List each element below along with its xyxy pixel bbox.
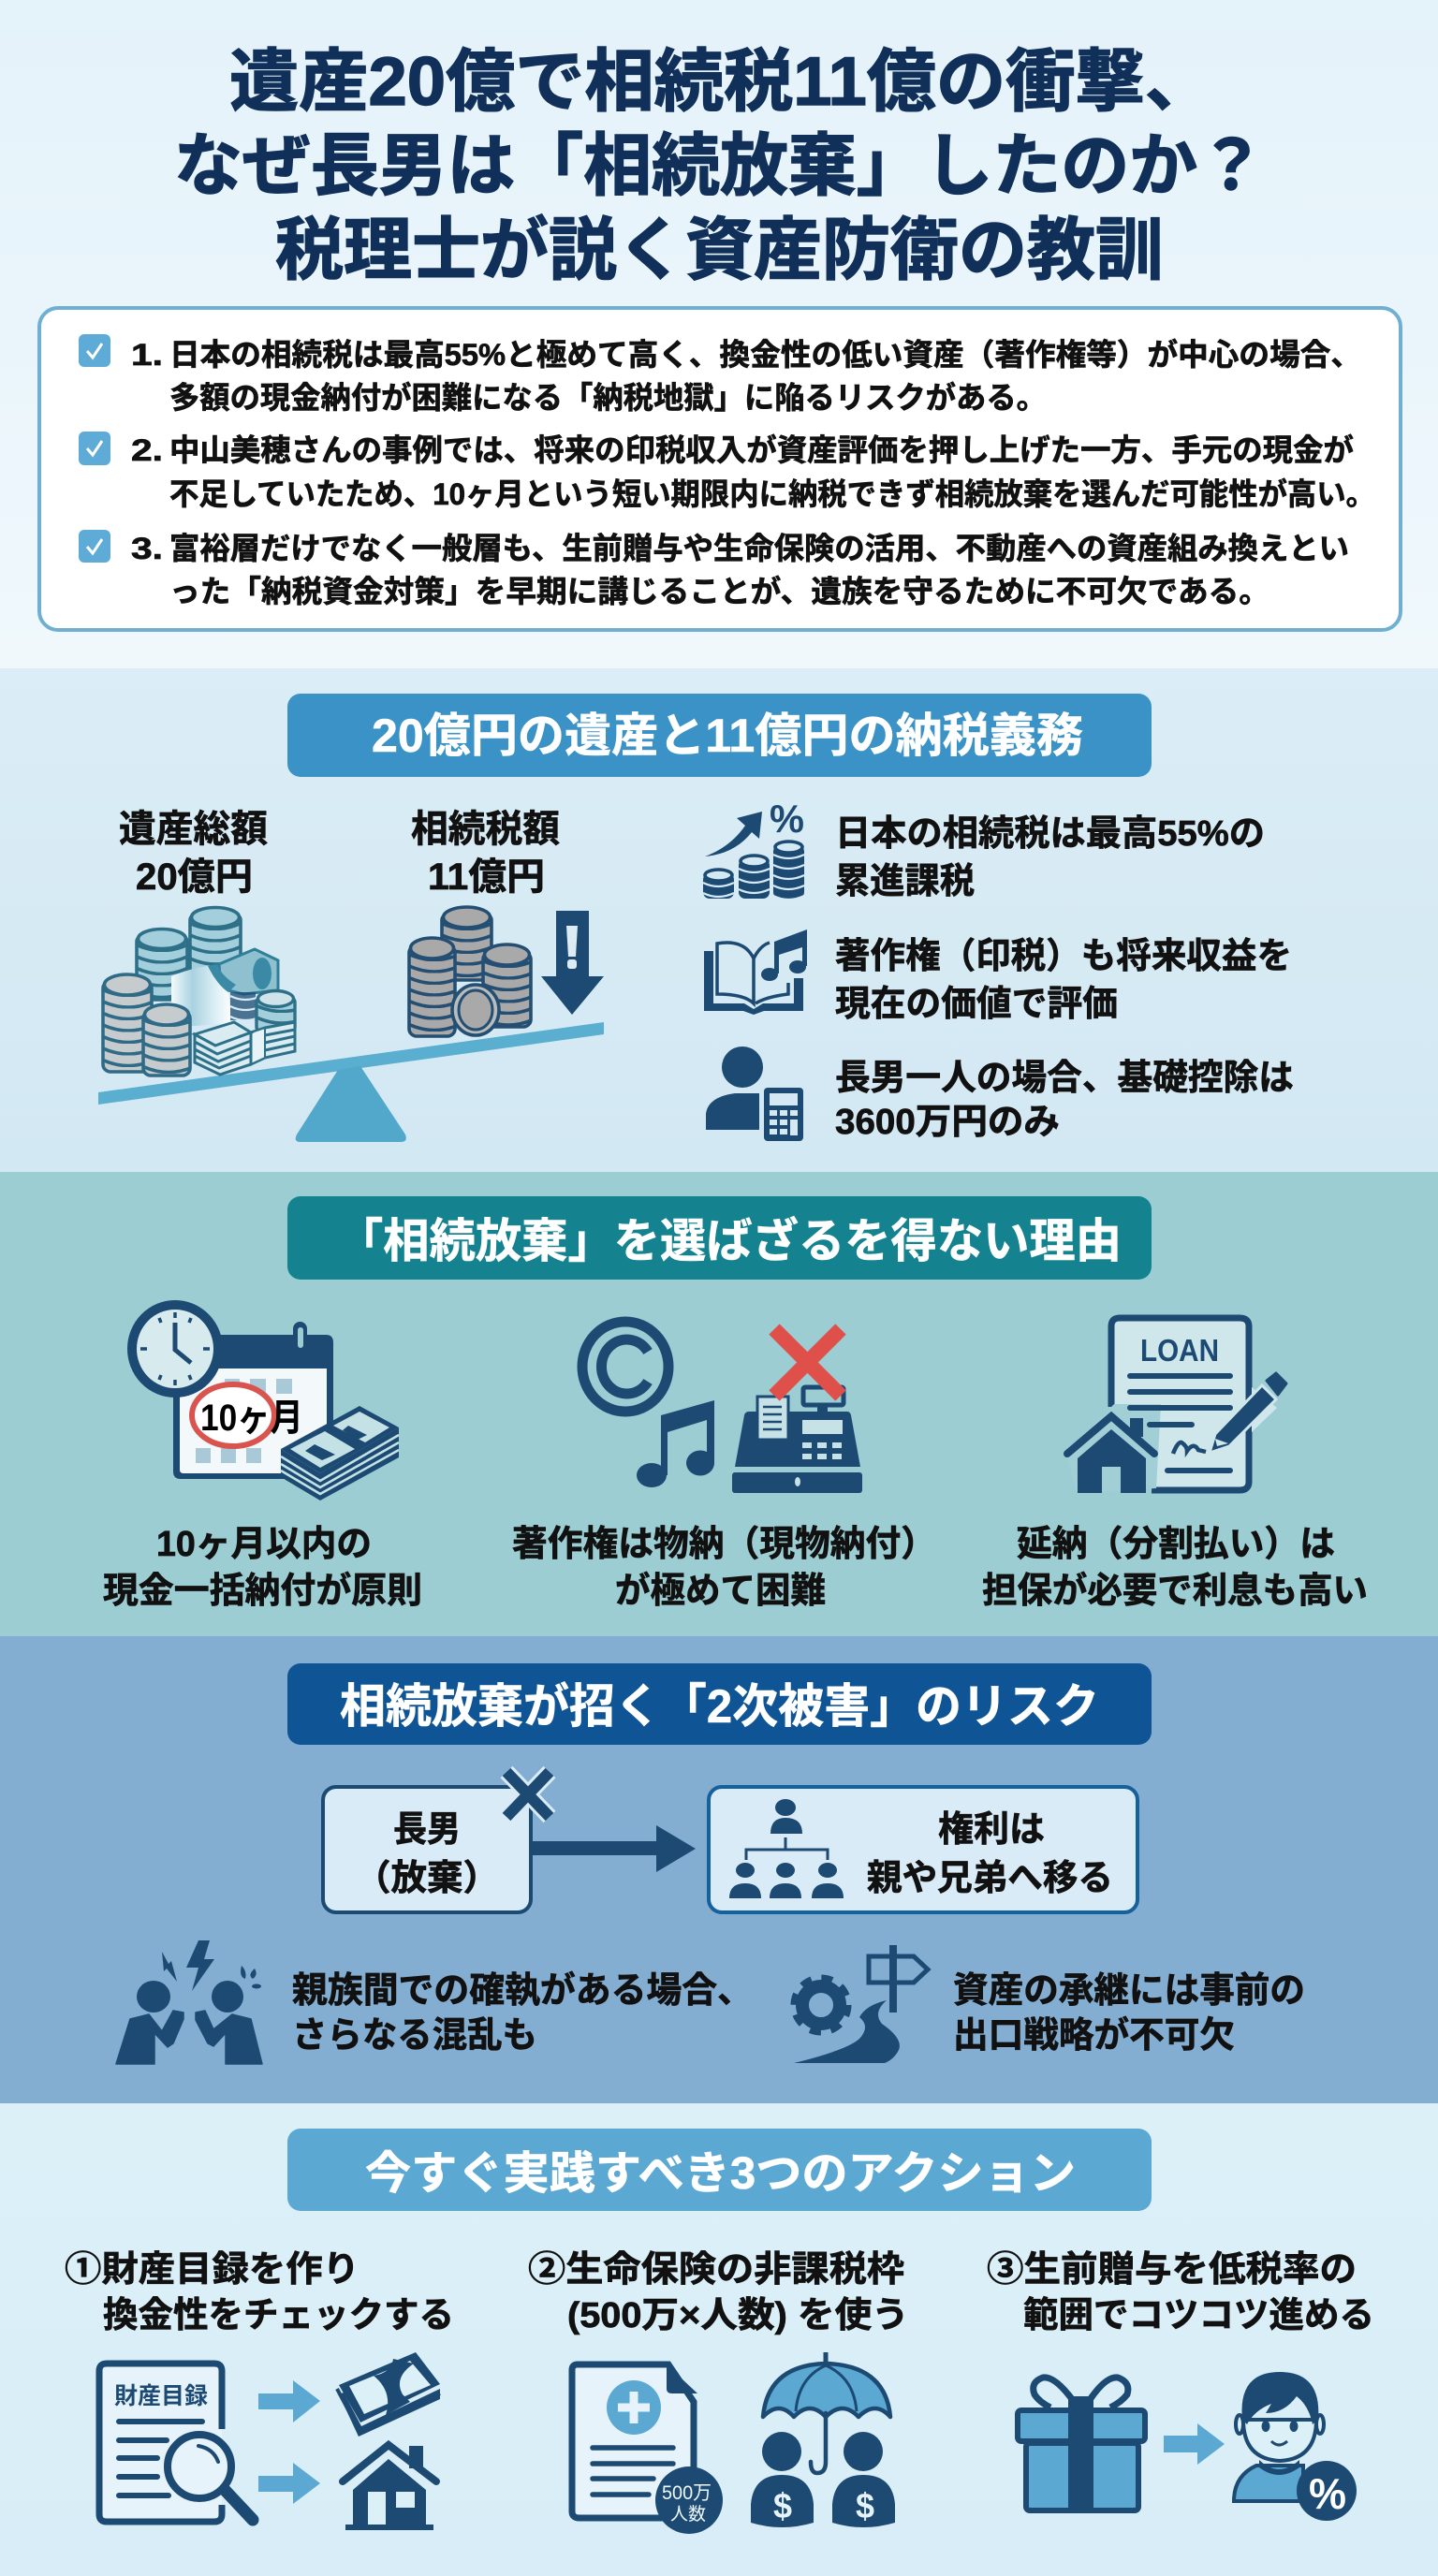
point 1 [79,334,1361,415]
icon: cross mark [506,1772,550,1817]
icon: seesaw [98,1022,604,1142]
point 1: 1. [131,338,163,372]
section 1 heading: 20億円の遺産と11億円の納税義務 [372,710,1083,762]
icon: tax coins [409,907,531,1036]
section 1 heading [287,694,1152,777]
icon: gift box [1018,2378,1145,2512]
text: top rate: 累進課税 [835,862,975,901]
text: family conflict: 親族間での確執がある場合、 [292,1971,753,2011]
icon: umbrella and people with money: $ [773,2487,792,2526]
text: cash payment: 10ヶ月以内の [156,1525,372,1564]
icon: cash [337,2352,440,2437]
text: action 1: ①財産目録を作り [65,2250,360,2290]
text: action 1 [65,2250,454,2335]
text: copyright valuation: 現在の価値で評価 [835,985,1118,1024]
title [174,44,1266,288]
text: exit strategy [953,1971,1305,2056]
text: copyright valuation: 著作権（印税）も将来収益を [835,937,1292,976]
text: in-kind payment [512,1525,936,1611]
tax label: 相続税額 [411,809,560,850]
point 2: 不足していたため、10ヶ月という短い期限内に納税できず相続放棄を選んだ可能性が高い。 [169,476,1375,511]
text: deferred payment [982,1525,1368,1611]
point 3: った「納税資金対策」を早期に講じることが、遺族を守るために不可欠である。 [169,574,1269,608]
item: top rate [703,797,1265,901]
icon: child with percent badge [1234,2372,1357,2521]
icon: loan document: LOAN [1140,1333,1219,1368]
tax label: 11億円 [428,856,545,898]
icon: umbrella and people with money [751,2352,895,2527]
box: eldest son: （放棄） [355,1859,499,1898]
text: exit strategy: 出口戦略が不可欠 [953,2016,1235,2056]
text: action 2: ②生命保険の非課税枠 [528,2250,904,2290]
icon: gear and signpost road [794,1945,928,2063]
icon: estate coins and cash [103,908,295,1076]
point 1: 日本の相続税は最高55%と極めて高く、換金性の低い資産（著作権等）が中心の場合、 [169,337,1361,372]
title: 遺産20億で相続税11億の衝撃、 [229,44,1214,120]
icon: family tree [729,1799,844,1898]
icon: medical insurance document [572,2364,723,2534]
text: deferred payment: 延納（分割払い）は [1017,1525,1335,1564]
item: copyright valuation [704,929,1292,1024]
box: rights transfer [709,1787,1137,1912]
title: なぜ長男は「相続放棄」したのか？ [174,128,1266,204]
panel: section 3 secondary risk [0,1636,1438,2103]
section 3 heading: 相続放棄が招く「2次被害」のリスク [340,1680,1099,1733]
text: action 2: (500万×人数) を使う [567,2296,909,2335]
point 3: 3. [131,532,163,565]
estate label [119,809,268,898]
icon: house [343,2445,436,2530]
title: 税理士が説く資産防衛の教訓 [275,212,1164,288]
point 2: 2. [131,433,163,467]
icon: rising coins [703,797,804,899]
text: cash payment: 現金一括納付が原則 [103,1572,422,1611]
text: deferred payment: 担保が必要で利息も高い [982,1572,1368,1611]
text: top rate [835,814,1265,901]
icon: family conflict [116,1940,262,2064]
box: rights transfer: 親や兄弟へ移る [867,1859,1113,1898]
section 2 heading: 「相続放棄」を選ばざるを得ない理由 [337,1215,1122,1267]
icon: umbrella and people with money: $ [856,2487,874,2526]
text: copyright valuation [835,937,1292,1024]
section 3 heading [287,1663,1152,1745]
icon: clock calendar cash [132,1305,399,1500]
text: top rate: 日本の相続税は最高55%の [835,814,1265,854]
estate label: 遺産総額 [119,809,268,850]
icon: red cross [774,1329,841,1396]
icon: medical insurance document: 500万 [662,2482,712,2504]
icon: child with percent badge: % [1309,2469,1346,2518]
text: action 3: 範囲でコツコツ進める [1023,2296,1374,2335]
point 2 [79,432,1375,511]
section 4 heading [287,2129,1152,2211]
panel: section 1 inheritance and tax [0,668,1438,1172]
header band [0,0,1438,668]
text: cash payment [103,1525,422,1611]
text: action 2 [528,2250,909,2335]
text: in-kind payment: 著作権は物納（現物納付） [512,1525,936,1564]
arrow [533,1825,696,1872]
estate label: 20億円 [136,856,253,898]
icon: clock calendar cash: 10ヶ月 [200,1398,303,1439]
text: basic deduction [835,1059,1294,1142]
icon: warning down arrow [541,911,604,1015]
icon: loan document [1065,1318,1286,1493]
box: eldest son [323,1787,531,1912]
text: action 3: ③生前贈与を低税率の [987,2250,1357,2290]
section 2 heading [287,1196,1152,1280]
item: basic deduction [706,1046,1294,1142]
text: basic deduction: 3600万円のみ [835,1103,1060,1142]
point 1: 多額の現金納付が困難になる「納税地獄」に陥るリスクがある。 [169,380,1047,415]
icon: asset list document: 財産目録 [114,2383,208,2409]
text: family conflict [292,1971,753,2056]
box: rights transfer: 権利は [938,1810,1045,1850]
point 3 [79,530,1349,608]
icon: asset list document [99,2364,253,2522]
panel: section 4 actions [0,2103,1438,2576]
icon: person and calculator [706,1046,803,1141]
arrows: list to assets [258,2380,320,2504]
section 4 heading: 今すぐ実践すべき3つのアクション [365,2149,1076,2199]
summary card [39,308,1401,630]
text: family conflict: さらなる混乱も [292,2016,537,2056]
arrow: gift to child [1164,2423,1225,2465]
box: eldest son: 長男 [393,1810,461,1850]
text: exit strategy: 資産の承継には事前の [953,1971,1305,2011]
text: action 1: 換金性をチェックする [103,2296,454,2335]
text: in-kind payment: が極めて困難 [615,1572,826,1611]
icon: copyright and cash register [582,1322,862,1493]
icon: rising coins: % [770,797,804,841]
text: action 3 [987,2250,1374,2335]
text: basic deduction: 長男一人の場合、基礎控除は [835,1059,1294,1098]
icon: medical insurance document: 人数 [670,2504,706,2525]
panel: section 2 reasons [0,1172,1438,1636]
point 3: 富裕層だけでなく一般層も、生前贈与や生命保険の活用、不動産への資産組み換えとい [169,532,1349,565]
tax label [411,809,560,898]
icon: book and note [704,929,807,1015]
point 2: 中山美穂さんの事例では、将来の印税収入が資産評価を押し上げた一方、手元の現金が [169,432,1354,467]
